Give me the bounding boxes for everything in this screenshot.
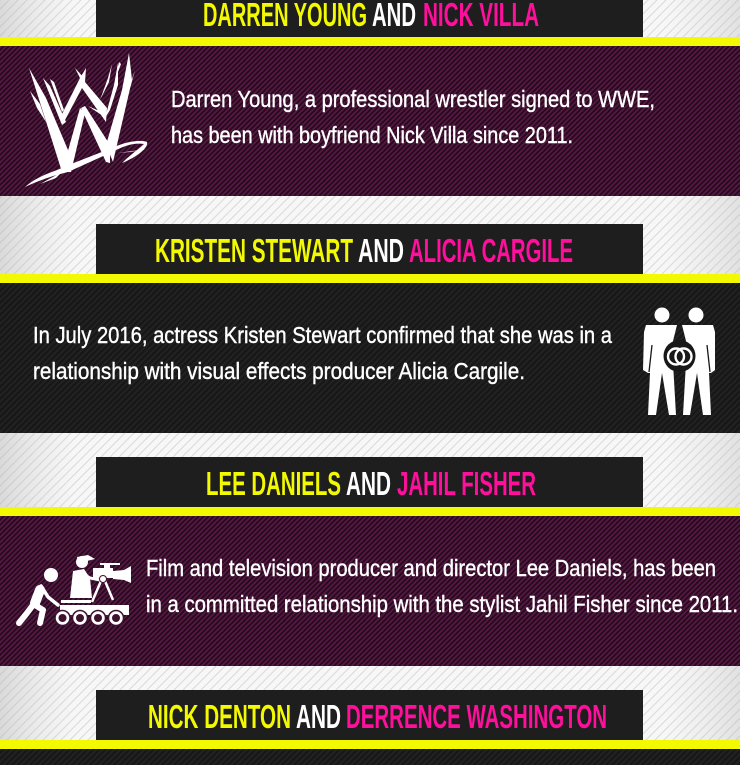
text: Darren Young description: has been with boyfriend Nick Villa since 2011.: [171, 122, 573, 148]
heading bar: Lee Daniels and Jahil Fisher: LEE DANIELS: [206, 466, 341, 503]
text: Kristen Stewart description: relationship with visual effects producer Alicia Cargile.: [33, 358, 525, 384]
section: Lee Daniels and Jahil Fisher: [0, 457, 740, 666]
heading bar: Kristen Stewart and Alicia Cargile: KRISTEN STEWART: [155, 233, 353, 270]
heading bar: Lee Daniels and Jahil Fisher: AND: [346, 466, 391, 503]
heading bar: Nick Denton and Derrence Washington: NICK DENTON: [148, 699, 291, 736]
heading bar: Kristen Stewart and Alicia Cargile: [96, 224, 643, 274]
panel: Lee Daniels: [0, 516, 740, 666]
heading bar: Lee Daniels and Jahil Fisher: JAHIL FISHER: [397, 466, 536, 503]
text: Darren Young description: [171, 86, 655, 148]
text: Darren Young description: Darren Young, a professional wrestler signed to WWE,: [171, 86, 655, 112]
heading bar: Kristen Stewart and Alicia Cargile: AND: [358, 233, 404, 270]
icon: couple with linked rings: [643, 308, 715, 415]
heading bar: Kristen Stewart and Alicia Cargile: ALICIA CARGILE: [409, 233, 573, 270]
heading bar: Darren Young and Nick Villa: [96, 0, 643, 37]
panel: Nick Denton: [0, 749, 740, 765]
icon: camera operator on dolly: [19, 555, 131, 626]
text: Lee Daniels description: [146, 555, 738, 617]
text: Kristen Stewart description: [33, 322, 613, 384]
heading bar: Nick Denton and Derrence Washington: [96, 690, 643, 740]
section: Darren Young and Nick Villa: [0, 0, 740, 196]
icon: WWE scratch logo: [25, 53, 148, 187]
heading bar: Lee Daniels and Jahil Fisher: [96, 457, 643, 507]
text: Kristen Stewart description: In July 2016, actress Kristen Stewart confirmed that she was in a: [33, 322, 613, 348]
heading bar: Nick Denton and Derrence Washington: AND: [296, 699, 341, 736]
panel: Kristen Stewart: [0, 283, 740, 433]
section: Kristen Stewart and Alicia Cargile: [0, 224, 740, 433]
section: Nick Denton and Derrence Washington: [0, 690, 740, 765]
panel: Darren Young: [0, 46, 740, 196]
